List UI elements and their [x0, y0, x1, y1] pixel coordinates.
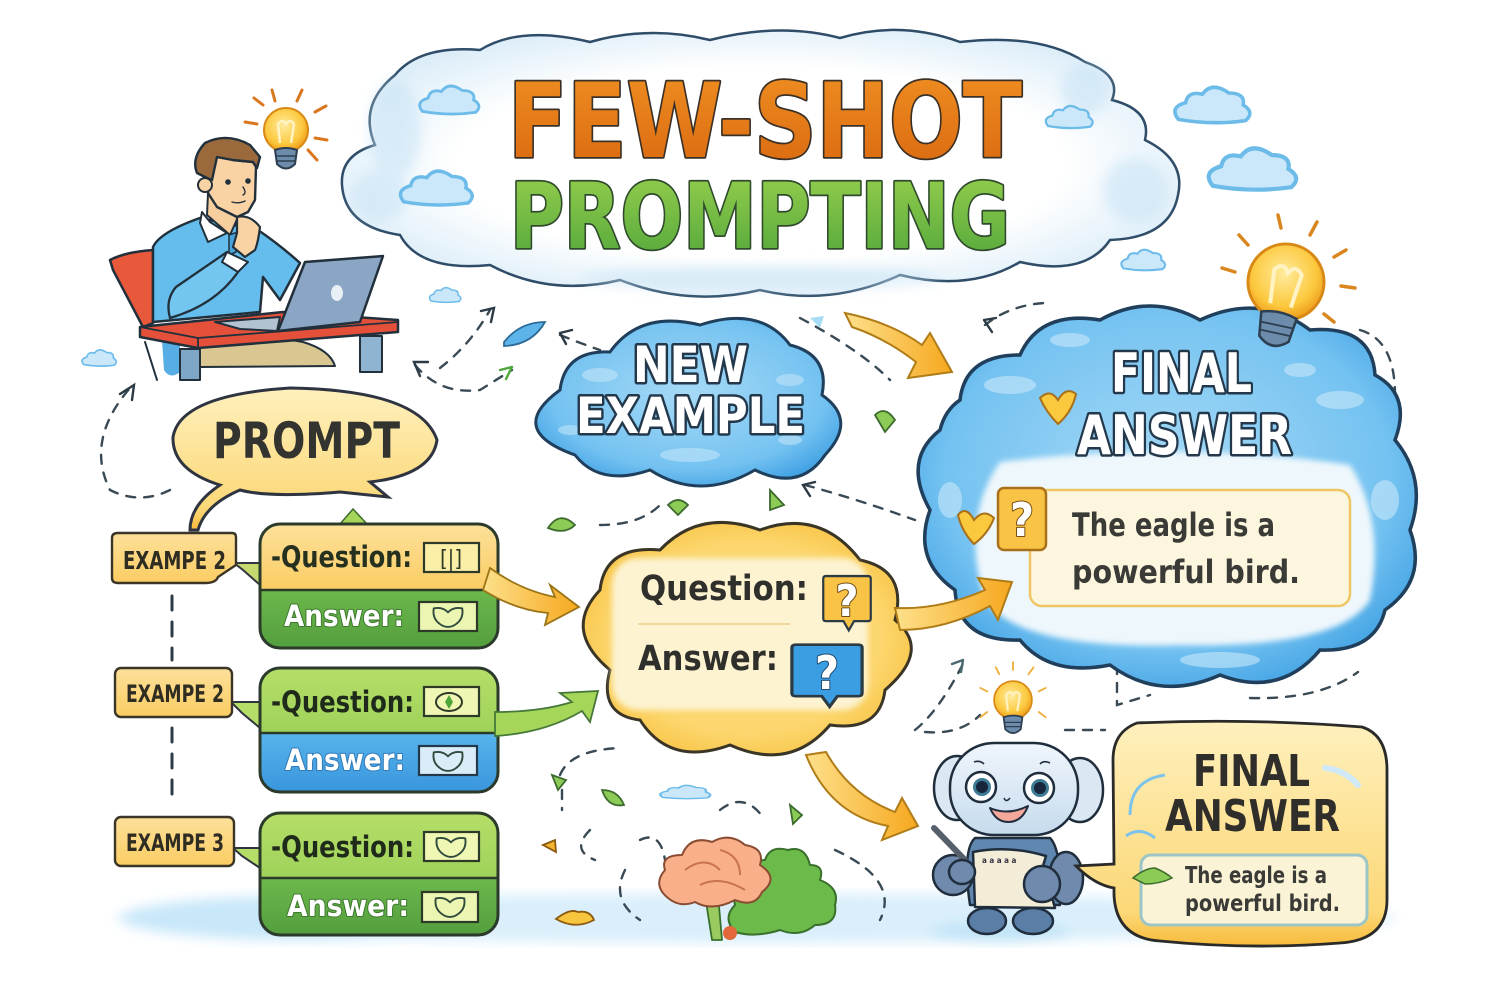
question row: [260, 813, 498, 878]
mouth: [990, 806, 1028, 822]
prompt label: PROMPT: [213, 412, 400, 470]
answer row: [260, 733, 498, 792]
cloud mottling: [558, 368, 804, 462]
feet: [968, 908, 1006, 934]
answer row: Answer:: [287, 889, 409, 923]
small decorative clouds: [82, 86, 1296, 799]
question icon: [823, 576, 871, 630]
dashed arrow heads: [120, 308, 996, 672]
final answer panel: powerful bird.: [1185, 891, 1340, 917]
arrow: center to final answer: [895, 578, 1012, 630]
robot: [933, 743, 1103, 934]
robot: a a a a a: [982, 856, 1016, 865]
connector arrow: top to final answer: [845, 313, 952, 378]
final answer panel: [1076, 721, 1387, 946]
example 2: [115, 668, 498, 792]
final answer cloud: ?: [1010, 493, 1034, 547]
heading: FINAL: [1193, 746, 1310, 797]
cloud shading: [352, 64, 1167, 290]
ground puddle: [115, 893, 1395, 943]
example 3: [115, 813, 498, 935]
hearts: [1040, 391, 1076, 424]
dashed paths: [101, 303, 1395, 920]
brows: [974, 761, 1050, 764]
final answer label: FINAL: [1111, 342, 1252, 405]
stem: [705, 895, 722, 940]
question icon: [998, 488, 1046, 550]
body: [967, 838, 1060, 905]
final answer cloud: The eagle is a: [1072, 506, 1275, 544]
brain flower and bush: [659, 838, 836, 940]
big lightbulb: [1222, 215, 1355, 353]
final answer panel: The eagle is a: [1185, 863, 1327, 889]
lightbulb: person: [245, 90, 327, 168]
final answer panel: ANSWER: [1165, 791, 1340, 842]
torso: [153, 218, 300, 322]
head: [208, 157, 256, 217]
title cloud: [342, 30, 1179, 297]
cuff: [222, 252, 248, 272]
question row: -Question:: [271, 540, 412, 574]
question row: [|]: [440, 547, 462, 572]
question row: -Question:: [271, 685, 414, 719]
question row: [260, 668, 498, 733]
question row: -Question:: [271, 830, 414, 864]
laptop: [215, 317, 280, 331]
title: few-shot: FEW-SHOT: [508, 62, 1022, 182]
question icon: ?: [836, 576, 858, 627]
label: EXAMPE 3: [126, 829, 224, 857]
question row: [260, 524, 498, 590]
new example cloud: EXAMPLE: [576, 387, 805, 445]
head: [950, 743, 1078, 835]
desk: [140, 312, 398, 348]
chair: [110, 250, 153, 327]
person at laptop: [110, 138, 398, 380]
stylus: [934, 828, 965, 860]
title: prompting: PROMPTING: [510, 165, 1010, 270]
inner panel: [612, 558, 868, 710]
example 1: [112, 509, 498, 648]
arms: [933, 855, 973, 895]
example dashed connectors: [170, 596, 174, 805]
flower: [659, 838, 771, 907]
label: [115, 668, 232, 717]
arrow: example 2 to center: [495, 691, 598, 736]
final answer cloud: [918, 306, 1416, 686]
answer row: Answer:: [285, 743, 405, 777]
answer box: [1030, 490, 1350, 606]
neck: [207, 193, 238, 235]
ears: [934, 756, 980, 820]
label: [112, 533, 236, 583]
leaf arrow: [1133, 868, 1172, 884]
question label: Question:: [640, 569, 808, 609]
arrow: center to robot: [806, 752, 918, 840]
eyes: [966, 772, 996, 802]
answer label: Answer:: [638, 639, 778, 679]
label: EXAMPE 2: [123, 546, 226, 575]
hand: [233, 216, 260, 257]
answer row: Answer:: [284, 599, 404, 633]
new example label: NEW: [633, 336, 748, 394]
forearm: [168, 252, 238, 318]
swoosh: [1126, 775, 1165, 838]
hand: [1024, 866, 1060, 902]
hair: [195, 138, 260, 180]
inner box: [1141, 855, 1367, 925]
collar: [200, 212, 227, 242]
answer icon: ?: [815, 646, 839, 700]
prompt bubble: [173, 388, 437, 530]
final answer cloud: ANSWER: [1077, 404, 1292, 467]
final answer cloud: powerful bird.: [1072, 553, 1300, 591]
label: EXAMPE 2: [126, 680, 224, 708]
leaves: [504, 316, 895, 925]
arrow: example 1 to center: [483, 568, 579, 625]
label: [115, 817, 234, 866]
center yellow cloud: [583, 522, 911, 755]
small lightbulb: robot: [980, 662, 1046, 733]
answer icon: [792, 645, 862, 707]
answer row: [260, 590, 498, 648]
pale inner region: [975, 452, 1374, 645]
new example cloud: [536, 318, 841, 486]
divider: [638, 623, 790, 625]
answer row: [260, 878, 498, 935]
bush: [728, 849, 836, 935]
legs: [200, 339, 335, 367]
cloud mottling: [938, 333, 1399, 668]
notepad: [973, 849, 1055, 908]
